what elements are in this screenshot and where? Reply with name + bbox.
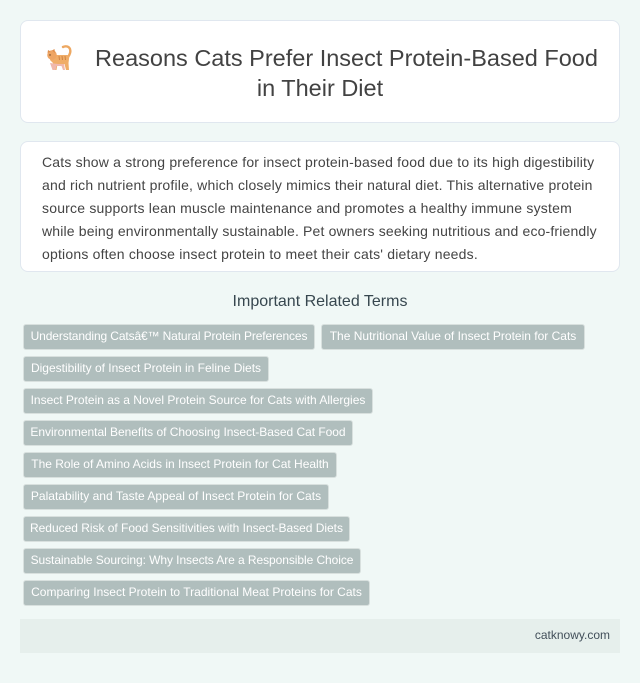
tag 10: Comparing Insect Protein to Traditional Meat Proteins for Cats (31, 585, 362, 599)
title: Reasons Cats Prefer Insect Protein-Based Food (95, 45, 598, 71)
tag 8: Reduced Risk of Food Sensitivities with Insect-Based Diets (30, 521, 343, 535)
tag 6 (23, 452, 337, 478)
heading: important related terms: Important Related Terms (233, 293, 407, 310)
tag 5 (23, 420, 353, 446)
title: in Their Diet (257, 75, 383, 101)
tag 8 (23, 516, 350, 542)
tag 3 (23, 356, 269, 382)
footer text: catknowy.com (535, 628, 610, 642)
footer bar (20, 619, 620, 653)
tag 7 (23, 484, 329, 510)
tag 3: Digestibility of Insect Protein in Feline Diets (31, 361, 261, 375)
text block: intro paragraph: while being environmentally sustainable. Pet owners seeking nutritious and eco-friendly (42, 223, 597, 239)
tag 4 (23, 388, 373, 414)
text block: intro paragraph: options often choose insect protein to meet their cats' dietary needs. (42, 246, 478, 262)
tag 7: Palatability and Taste Appeal of Insect Protein for Cats (31, 489, 321, 503)
text block: intro paragraph: source supports lean muscle maintenance and promotes a healthy immune system (42, 200, 572, 216)
tag 9 (23, 548, 361, 574)
tag 1: Understanding Catsâ€™ Natural Protein Preferences (31, 329, 307, 343)
tag 2: The Nutritional Value of Insect Protein for Cats (330, 329, 576, 343)
text block: intro paragraph: Cats show a strong preference for insect protein-based food due to its high digestibility (42, 154, 594, 170)
panel: intro text card (20, 141, 620, 272)
tag 1 (23, 324, 315, 350)
icon: cat (47, 45, 72, 70)
title (95, 45, 598, 101)
tag 10 (23, 580, 370, 606)
text block: intro paragraph: and rich nutrient profile, which closely mimics their natural diet. This alternative protein (42, 177, 593, 193)
tag list (23, 324, 585, 606)
tag 2 (321, 324, 585, 350)
tag 4: Insect Protein as a Novel Protein Source for Cats with Allergies (31, 393, 365, 407)
tag 9: Sustainable Sourcing: Why Insects Are a Responsible Choice (31, 553, 353, 567)
text block: intro paragraph (42, 154, 597, 262)
tag 5: Environmental Benefits of Choosing Insect-Based Cat Food (30, 425, 346, 439)
tag 6: The Role of Amino Acids in Insect Protein for Cat Health (31, 457, 329, 471)
panel: title card (20, 20, 620, 123)
